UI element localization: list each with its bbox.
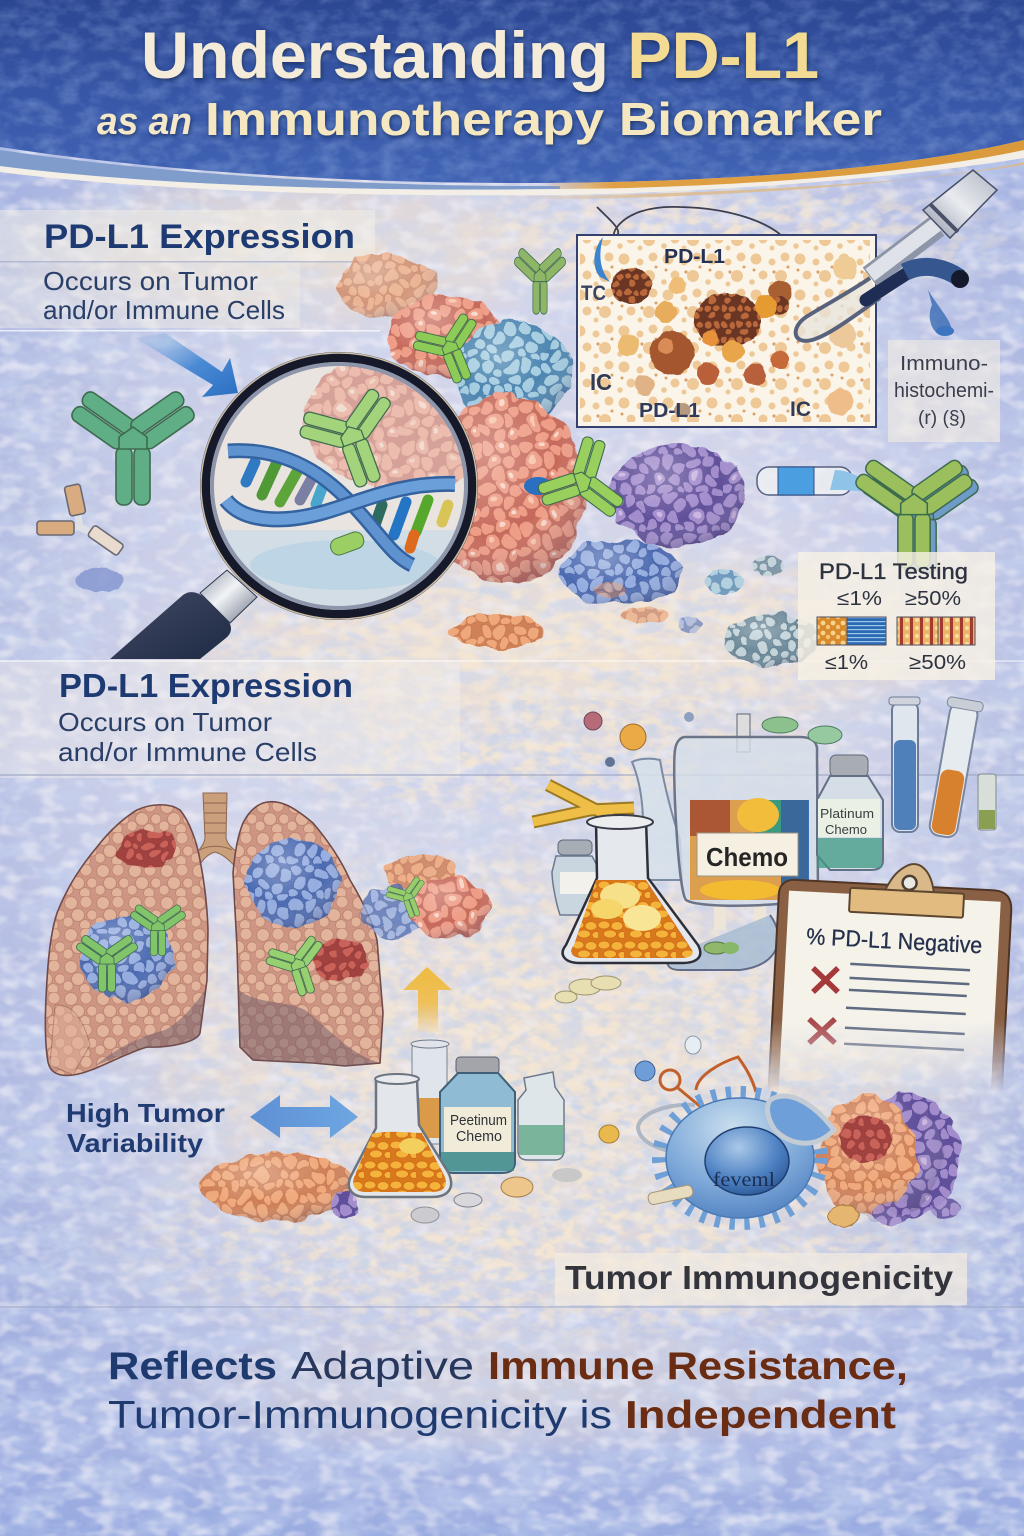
label <box>697 833 798 876</box>
line 1: Immune Resistance, <box>488 1345 908 1388</box>
clip <box>849 861 966 918</box>
label text: Chemo <box>456 1128 502 1145</box>
panel: Tumor Immunogenicity <box>555 1253 967 1305</box>
line 1: Adaptive <box>291 1345 474 1388</box>
small pebbles <box>411 1036 701 1223</box>
chemo items <box>533 696 996 1003</box>
tumor red right <box>314 939 366 981</box>
handle <box>110 570 257 659</box>
subtext line 2: and/or Immune Cells <box>58 737 317 767</box>
text line: histochemi- <box>894 380 994 402</box>
antibody on large tumor <box>524 430 629 537</box>
x mark <box>813 968 838 992</box>
label IC right: IC <box>790 398 811 421</box>
tumor cluster middle <box>361 855 490 939</box>
left lung <box>45 805 208 1075</box>
antibody: small top <box>513 247 567 314</box>
title <box>97 18 882 145</box>
DNA strands <box>228 451 412 565</box>
label PD-L1: PD-L1 <box>664 246 725 268</box>
list lines <box>844 964 970 1050</box>
conclusion text <box>108 1345 908 1437</box>
heading block: PD-L1 Expression top <box>43 218 355 325</box>
pills <box>555 976 621 1003</box>
arrow: double headed <box>250 1095 358 1138</box>
right lung <box>233 802 383 1066</box>
platinum vial <box>440 1057 515 1173</box>
lens antibody <box>291 382 416 501</box>
antibody: large right <box>853 458 981 573</box>
antibody: on pink cluster <box>407 308 496 394</box>
antibody: large teal-green left <box>69 389 197 505</box>
test tube orange <box>924 696 984 839</box>
staining dropper tool <box>796 170 997 341</box>
board <box>768 878 1012 1089</box>
subtext line 1: Occurs on Tumor <box>58 707 272 737</box>
orange flask <box>349 1074 451 1197</box>
High Tumor Variability label <box>66 1098 225 1158</box>
trachea <box>195 793 241 870</box>
yellow tubing <box>533 785 634 822</box>
tumor cell <box>818 1091 960 1227</box>
lower vials group <box>349 1036 701 1223</box>
line 2 <box>108 1394 896 1437</box>
heading block: PD-L1 Expression lower <box>58 667 353 767</box>
antibody: small tan <box>37 484 124 556</box>
stained tissue <box>580 237 870 422</box>
title line 2: as an: as an <box>97 101 192 143</box>
test tube pouring <box>757 467 872 495</box>
small vial <box>978 774 996 830</box>
large flask <box>563 815 700 963</box>
magnifying glass <box>110 348 505 659</box>
chemo bag <box>674 714 818 906</box>
antibody lung <box>129 904 187 956</box>
antibody <box>382 874 435 924</box>
arrow: up yellow <box>403 967 452 1032</box>
clipboard <box>768 863 1012 1089</box>
clipboard title: % PD-L1 Negative <box>806 923 983 958</box>
heading: PD-L1 Expression <box>44 218 355 256</box>
swatch high <box>897 617 975 645</box>
label IC left: IC <box>590 369 612 395</box>
back tube <box>411 1040 449 1144</box>
pointer curve <box>597 207 786 240</box>
orange wires <box>660 1057 756 1108</box>
line 1 <box>108 1345 908 1388</box>
label text: Peetinum <box>450 1112 507 1129</box>
line 2: Tumor-Immunogenicity is <box>108 1394 612 1437</box>
line 1: High Tumor <box>66 1098 225 1128</box>
arrow: pointing to magnifier <box>135 333 238 397</box>
subtext line 2: and/or Immune Cells <box>43 295 285 325</box>
tumor red upper left <box>118 828 176 868</box>
value: ≤1% <box>837 588 882 610</box>
text line: (r) (§) <box>918 408 966 429</box>
small bottle right <box>518 1072 564 1160</box>
label: Tumor Immunogenicity <box>565 1259 954 1296</box>
tumor blue left <box>80 913 174 1001</box>
tumor blue right <box>246 839 340 927</box>
label text: Chemo <box>706 842 788 872</box>
tumor cluster lower left <box>200 1153 359 1221</box>
subtext line 1: Occurs on Tumor <box>43 266 258 296</box>
swatch low <box>817 617 886 645</box>
x mark <box>809 1019 835 1043</box>
lungs illustration <box>45 793 383 1075</box>
value: ≤1% <box>825 652 868 674</box>
line 2: Independent <box>625 1394 896 1437</box>
label text: Platinum <box>820 806 874 821</box>
IHC slide panel <box>577 207 876 427</box>
cell text: feveml <box>713 1169 775 1191</box>
header banner <box>0 0 1024 199</box>
platinum bottle <box>817 755 883 870</box>
value: ≥50% <box>905 588 961 610</box>
antibody lung <box>75 934 139 992</box>
panel: Immunohistochemistry label <box>888 340 1000 442</box>
line 2: Variability <box>67 1128 204 1158</box>
text line: Immuno- <box>900 353 988 375</box>
panel: PD-L1 testing <box>798 552 995 680</box>
value: ≥50% <box>909 652 966 674</box>
back flask <box>632 759 682 880</box>
lens ring <box>201 353 477 619</box>
label text: Chemo <box>825 822 867 837</box>
line 1: Reflects <box>108 1345 277 1388</box>
dish and stand <box>667 905 778 970</box>
loop handle <box>638 1105 695 1153</box>
lens content <box>220 366 464 606</box>
test tube blue <box>889 697 920 832</box>
heading: PD-L1 Testing <box>819 559 968 584</box>
title line 1: Understanding PD-L1 <box>141 18 819 92</box>
label PD-L1 lower: PD-L1 <box>639 400 700 422</box>
floating spheres <box>584 712 842 767</box>
label TC: TC <box>581 282 606 305</box>
small bottle left <box>552 840 602 915</box>
immune cell with tumor <box>638 1057 960 1227</box>
heading: PD-L1 Expression <box>59 667 353 704</box>
tumor cell clusters top <box>76 254 820 666</box>
paper <box>779 890 1001 1088</box>
title line 2: Immunotherapy Biomarker: Immunotherapy Biomarker <box>205 93 882 145</box>
DNA rungs <box>246 462 448 548</box>
receptor pocket <box>768 1096 834 1143</box>
lens small green pill <box>328 530 366 557</box>
antibody lung <box>261 932 337 1004</box>
spiky immune cell <box>638 1096 834 1218</box>
